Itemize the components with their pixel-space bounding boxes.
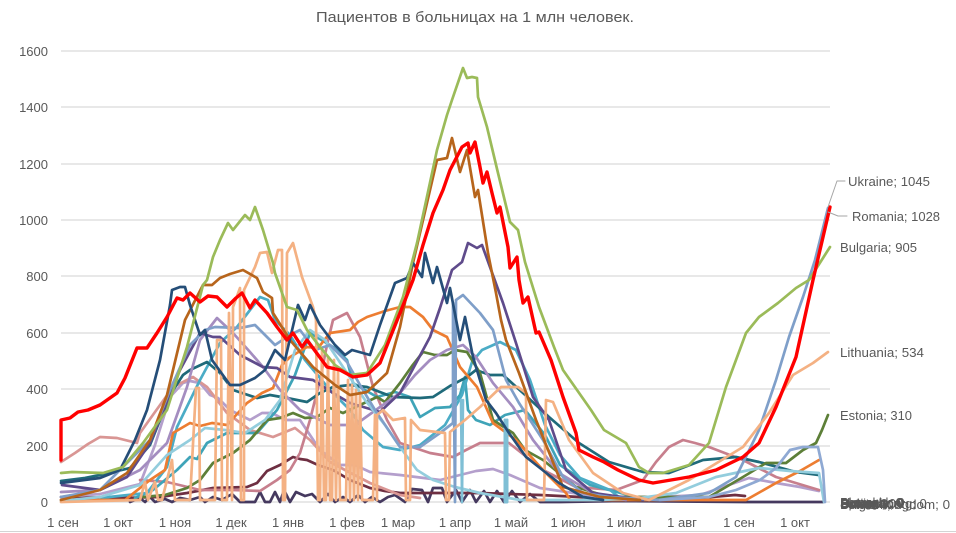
- x axis labels: 1 авг: [667, 515, 697, 530]
- series: Lithuania light orange: [61, 243, 828, 502]
- x axis labels: 1 окт: [780, 515, 810, 530]
- x axis labels: 1 фев: [329, 515, 365, 530]
- x axis labels: 1 мар: [381, 515, 415, 530]
- y axis labels: 1400: [19, 100, 48, 115]
- x axis labels: 1 сен: [723, 515, 755, 530]
- series: grey blue with drop: [660, 447, 825, 502]
- x axis labels: 1 окт: [103, 515, 133, 530]
- data labels: Luxembourg; 0: [840, 496, 927, 511]
- series: dark maroon: [61, 457, 745, 498]
- x axis labels: 1 дек: [215, 515, 247, 530]
- data labels: Ukraine; 1045: [848, 174, 930, 189]
- y axis labels: 600: [26, 326, 48, 341]
- series: Romania red: [61, 142, 830, 483]
- series: lilac lower: [61, 381, 819, 497]
- series: pink: [61, 377, 420, 498]
- y axis labels: 800: [26, 269, 48, 284]
- x axis labels: [47, 515, 810, 530]
- x axis labels: 1 сен: [47, 515, 79, 530]
- x axis labels: 1 янв: [272, 515, 304, 530]
- data labels: Bulgaria; 905: [840, 240, 917, 255]
- data labels: Romania; 1028: [852, 209, 940, 224]
- data labels: Portugal; 0: [840, 495, 903, 510]
- data labels: [840, 174, 950, 512]
- y axis labels: 400: [26, 382, 48, 397]
- data labels: Belgium; 0: [840, 497, 901, 512]
- y axis labels: 200: [26, 439, 48, 454]
- series: dark blue: [61, 253, 603, 500]
- title: Пациентов в больницах на 1 млн человек.: [316, 10, 634, 26]
- series: orange: [61, 307, 819, 500]
- data labels: Hungary; 0: [841, 495, 905, 510]
- data labels: Poland; 0: [841, 496, 896, 511]
- series: light blue: [61, 330, 824, 502]
- series: Bulgaria green: [61, 68, 830, 473]
- series: light purple: [61, 318, 626, 500]
- y axis labels: [19, 44, 48, 510]
- x axis labels: 1 май: [494, 515, 528, 530]
- series: dark purple: [62, 243, 643, 500]
- data labels: Estonia; 310: [840, 408, 912, 423]
- y axis labels: 0: [41, 495, 48, 510]
- series: dark teal: [61, 362, 819, 481]
- data labels: Slovenia; 0: [840, 496, 904, 511]
- y axis labels: 1000: [19, 213, 48, 228]
- data labels: Slovakia; 0: [840, 495, 904, 510]
- x axis labels: 1 июл: [606, 515, 642, 530]
- series: dark purple zigzag: [130, 488, 823, 502]
- series: brown: [61, 138, 640, 500]
- series: teal upper: [100, 297, 700, 498]
- series: teal mid: [135, 333, 640, 498]
- series: Ukraine blue: [61, 208, 828, 502]
- leader lines: [828, 181, 847, 216]
- x axis labels: 1 апр: [439, 515, 471, 530]
- data labels: United Kingdom; 0: [840, 497, 950, 512]
- x axis labels: 1 ноя: [159, 515, 191, 530]
- series: rose: [140, 313, 819, 491]
- y axis labels: 1600: [19, 44, 48, 59]
- series: cyan spike at April: [461, 400, 463, 502]
- x axis labels: 1 июн: [550, 515, 586, 530]
- data labels: Spain; 0: [840, 496, 888, 511]
- series: cyan spike at May: [505, 420, 507, 502]
- data labels: Lithuania; 534: [840, 345, 924, 360]
- series: Estonia dark green: [143, 350, 828, 497]
- y axis labels: 1200: [19, 157, 48, 172]
